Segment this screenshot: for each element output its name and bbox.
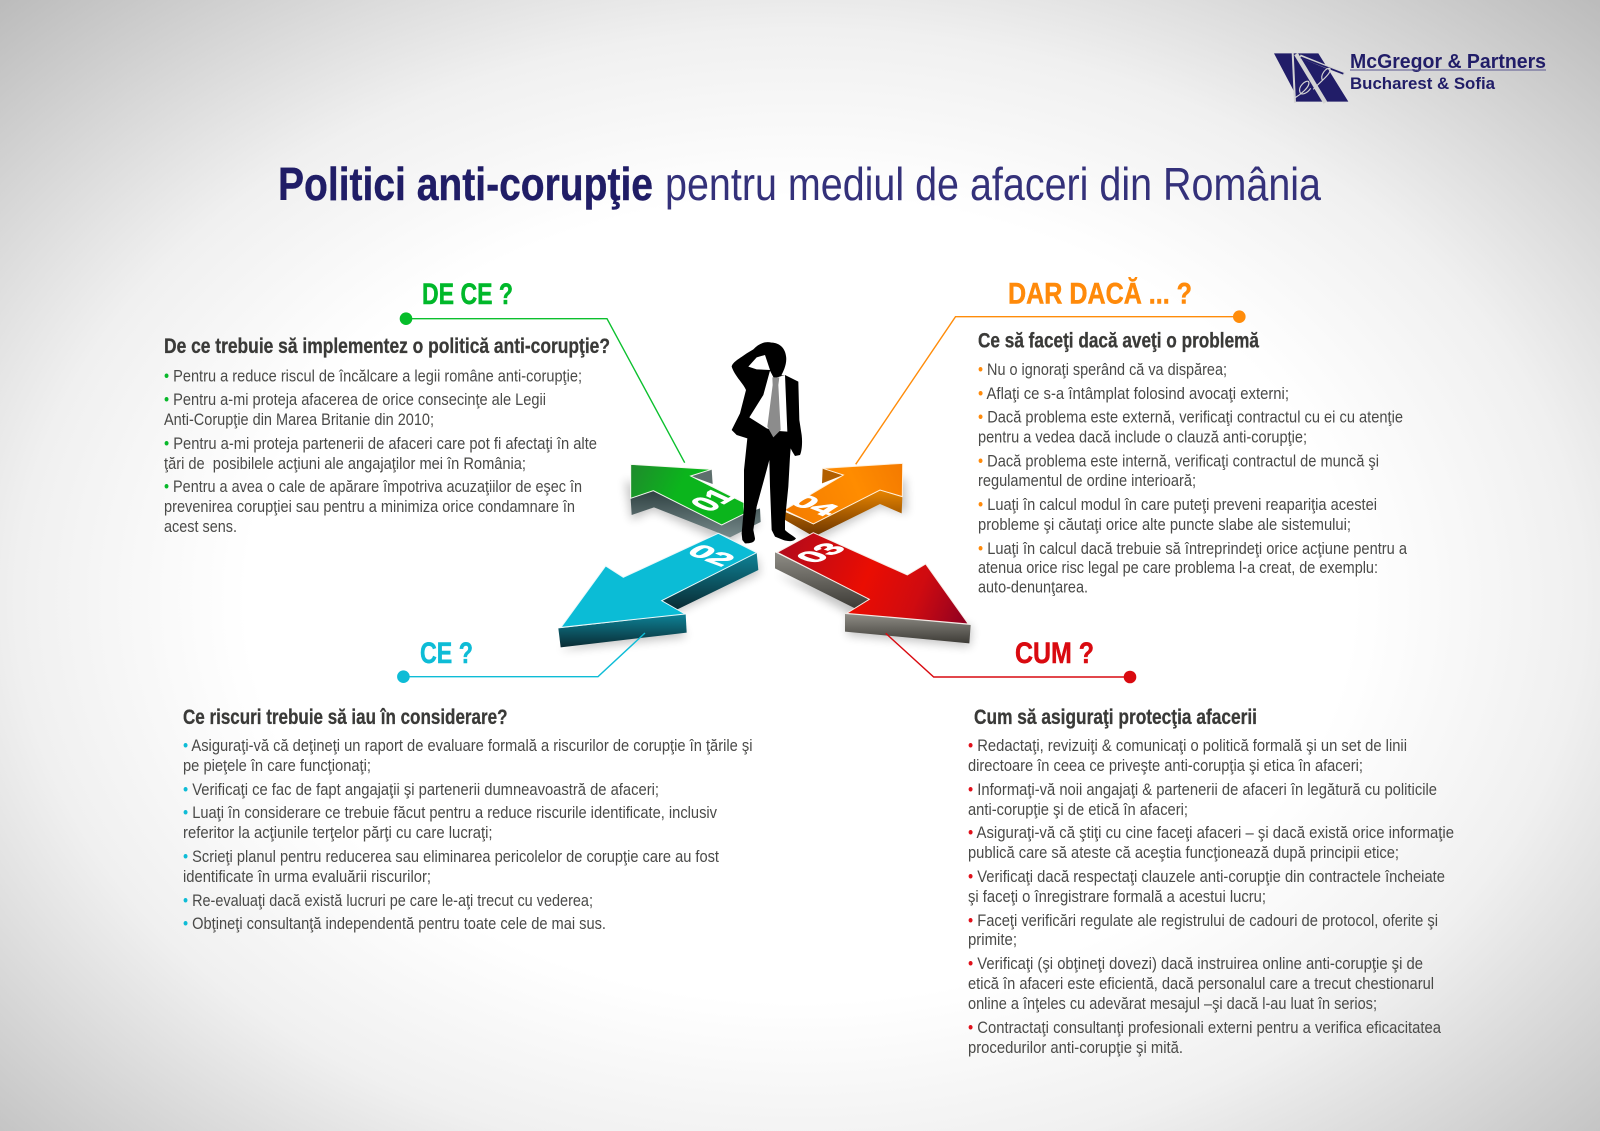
leader line: red bbox=[886, 633, 1136, 683]
text block: CE bbox=[183, 736, 752, 933]
text block: DE CE: • Pentru a avea o cale de apărare împotriva acuzaţiilor de eşec în bbox=[164, 477, 582, 496]
section label: CUM: CUM ? bbox=[1015, 637, 1094, 670]
text block: DAR DACĂ: • Aflaţi ce s-a întâmplat folosind avocaţi externi; bbox=[978, 384, 1289, 403]
logo: McGregor & Partners bbox=[1274, 51, 1546, 103]
logo name: McGregor & Partners bbox=[1350, 51, 1546, 73]
section label: CE: CE ? bbox=[420, 637, 473, 670]
title bbox=[278, 158, 1321, 210]
text block: DAR DACĂ: regulamentul de ordine interioară; bbox=[978, 471, 1196, 490]
text block: CUM: • Contractaţi consultanţi profesionali externi pentru a verifica eficacitatea bbox=[968, 1018, 1441, 1037]
leader line: teal bbox=[397, 633, 645, 683]
text block: CUM: • Redactaţi, revizuiţi & comunicaţi o politică formală şi un set de linii bbox=[968, 736, 1407, 755]
text block: DE CE: prevenirea corupţiei sau pentru a minimiza orice condamnare în bbox=[164, 497, 575, 516]
title: Politici anti-corupţie bbox=[278, 158, 653, 210]
arrow 04: orange bbox=[784, 463, 903, 537]
text block: DAR DACĂ: atenua orice risc legal pe care problema l-a creat, de exemplu: bbox=[978, 558, 1378, 577]
panel: DE CE bbox=[164, 278, 610, 536]
heading: DE CE: De ce trebuie să implementez o politică anti-corupţie? bbox=[164, 335, 610, 358]
text block: DAR DACĂ: • Luaţi în calcul modul în care puteţi preveni reapariţia acestei bbox=[978, 495, 1377, 514]
text block: DE CE: • Pentru a-mi proteja afacerea de orice consecinţe ale Legii bbox=[164, 390, 546, 409]
arrow 01: green bbox=[631, 464, 761, 537]
text block: CUM: etică în afaceri este eficientă, dacă personalul care a trecut chestionarul bbox=[968, 974, 1434, 993]
arrow 03: red bbox=[775, 533, 971, 643]
text block: CE: • Scrieţi planul pentru reducerea sau eliminarea pericolelor de corupţie care au fost bbox=[183, 847, 719, 866]
heading: DAR DACĂ: Ce să faceţi dacă aveţi o problemă bbox=[978, 330, 1259, 353]
text block: DE CE: acest sens. bbox=[164, 517, 237, 536]
panel: DAR DACĂ bbox=[978, 276, 1407, 597]
number 03: 03 bbox=[787, 540, 854, 566]
title: pentru mediul de afaceri din România bbox=[665, 158, 1321, 210]
number 02: 02 bbox=[680, 540, 742, 570]
panel: CUM bbox=[968, 637, 1454, 1057]
text block: CUM: • Faceţi verificări regulate ale registrului de cadouri de protocol, oferite şi bbox=[968, 911, 1438, 930]
text block: CUM: anti-corupţie şi de etică în afaceri; bbox=[968, 800, 1188, 819]
text block: CE: • Asiguraţi-vă că deţineţi un raport de evaluare formală a riscurilor de corupţie în ţările şi bbox=[183, 736, 752, 755]
text block: CUM: • Informaţi-vă noii angajaţi & partenerii de afaceri în legătură cu politicile bbox=[968, 780, 1437, 799]
panel: CE bbox=[183, 637, 752, 933]
text block: CE: • Obţineţi consultanţă independentă pentru toate cele de mai sus. bbox=[183, 914, 606, 933]
text block: CUM: online a înţeles cu adevărat mesajul –şi dacă l-au luat în serios; bbox=[968, 994, 1377, 1013]
text block: CE: • Luaţi în considerare ce trebuie făcut pentru a reduce riscurile identificate, inclusiv bbox=[183, 803, 717, 822]
text block: DE CE: Anti-Corupţie din Marea Britanie din 2010; bbox=[164, 410, 434, 429]
text block: DE CE: • Pentru a-mi proteja partenerii de afaceri care pot fi afectaţi în alte bbox=[164, 434, 597, 453]
text block: CUM: publică care să ateste că aceştia funcţionează după principii etice; bbox=[968, 843, 1399, 862]
text block: DAR DACĂ: auto-denunţarea. bbox=[978, 578, 1088, 597]
text block: CE: referitor la acţiunile terţelor părţi cu care lucraţi; bbox=[183, 823, 492, 842]
text block: DAR DACĂ: • Luaţi în calcul dacă trebuie să întreprindeţi orice acţiune pentru a bbox=[978, 539, 1407, 558]
text block: DE CE bbox=[164, 366, 597, 536]
text block: DAR DACĂ bbox=[978, 360, 1407, 597]
text block: CUM: primite; bbox=[968, 930, 1017, 949]
text block: CUM: procedurilor anti-corupţie şi mită. bbox=[968, 1038, 1183, 1057]
number 04: 04 bbox=[784, 490, 846, 520]
text block: CUM: • Asiguraţi-vă că ştiţi cu cine faceţi afaceri – şi dacă există orice informaţie bbox=[968, 823, 1454, 842]
logo mark bbox=[1274, 53, 1348, 103]
text block: DAR DACĂ: pentru a vedea dacă include o clauză anti-corupţie; bbox=[978, 428, 1307, 447]
text block: DE CE: ţări de posibilele acţiuni ale angajaţilor mei în România; bbox=[164, 454, 526, 473]
arrow shadows bbox=[560, 477, 972, 650]
text block: DAR DACĂ: • Dacă problema este internă, verificaţi contractul de muncă şi bbox=[978, 452, 1379, 471]
section label: DE CE: DE CE ? bbox=[422, 278, 513, 311]
arrow 02: teal bbox=[558, 533, 758, 647]
text block: CUM: • Verificaţi (şi obţineţi dovezi) dacă instruirea online anti-corupţie şi de bbox=[968, 954, 1423, 973]
section label: DAR DACĂ: DAR DACĂ ... ? bbox=[1008, 276, 1192, 310]
text block: DAR DACĂ: • Dacă problema este externă, verificaţi contractul cu ei cu atenţie bbox=[978, 408, 1403, 427]
text block: DAR DACĂ: probleme şi căutaţi orice alte puncte slabe ale sistemului; bbox=[978, 515, 1351, 534]
text block: CE: • Re-evaluaţi dacă există lucruri pe care le-aţi trecut cu vederea; bbox=[183, 891, 593, 910]
text block: CUM: directoare în ceea ce priveşte anti-corupţia şi etica în afaceri; bbox=[968, 756, 1363, 775]
text block: CUM: • Verificaţi dacă respectaţi clauzele anti-corupţie din contractele încheiate bbox=[968, 867, 1445, 886]
heading: CE: Ce riscuri trebuie să iau în considerare? bbox=[183, 706, 508, 729]
icon: businessman silhouette bbox=[732, 342, 802, 543]
text block: DE CE: • Pentru a reduce riscul de încălcare a legii române anti-corupţie; bbox=[164, 366, 582, 386]
text block: CE: identificate în urma evaluării riscurilor; bbox=[183, 867, 431, 886]
leader line: orange bbox=[856, 310, 1246, 464]
central illustration: arrows and figure bbox=[558, 342, 972, 650]
heading: CUM: Cum să asiguraţi protecţia afacerii bbox=[974, 706, 1257, 729]
leader line: green bbox=[400, 312, 685, 463]
number 01: 01 bbox=[683, 485, 743, 516]
text block: DAR DACĂ: • Nu o ignoraţi sperând că va dispărea; bbox=[978, 360, 1227, 379]
text block: CUM: şi faceţi o înregistrare formală a acestui lucru; bbox=[968, 887, 1266, 906]
text block: CUM bbox=[968, 736, 1454, 1057]
logo location: Bucharest & Sofia bbox=[1350, 74, 1496, 93]
text block: CE: pe pieţele în care funcţionaţi; bbox=[183, 756, 371, 775]
text block: CE: • Verificaţi ce fac de fapt angajaţii şi partenerii dumneavoastră de afaceri; bbox=[183, 780, 659, 799]
